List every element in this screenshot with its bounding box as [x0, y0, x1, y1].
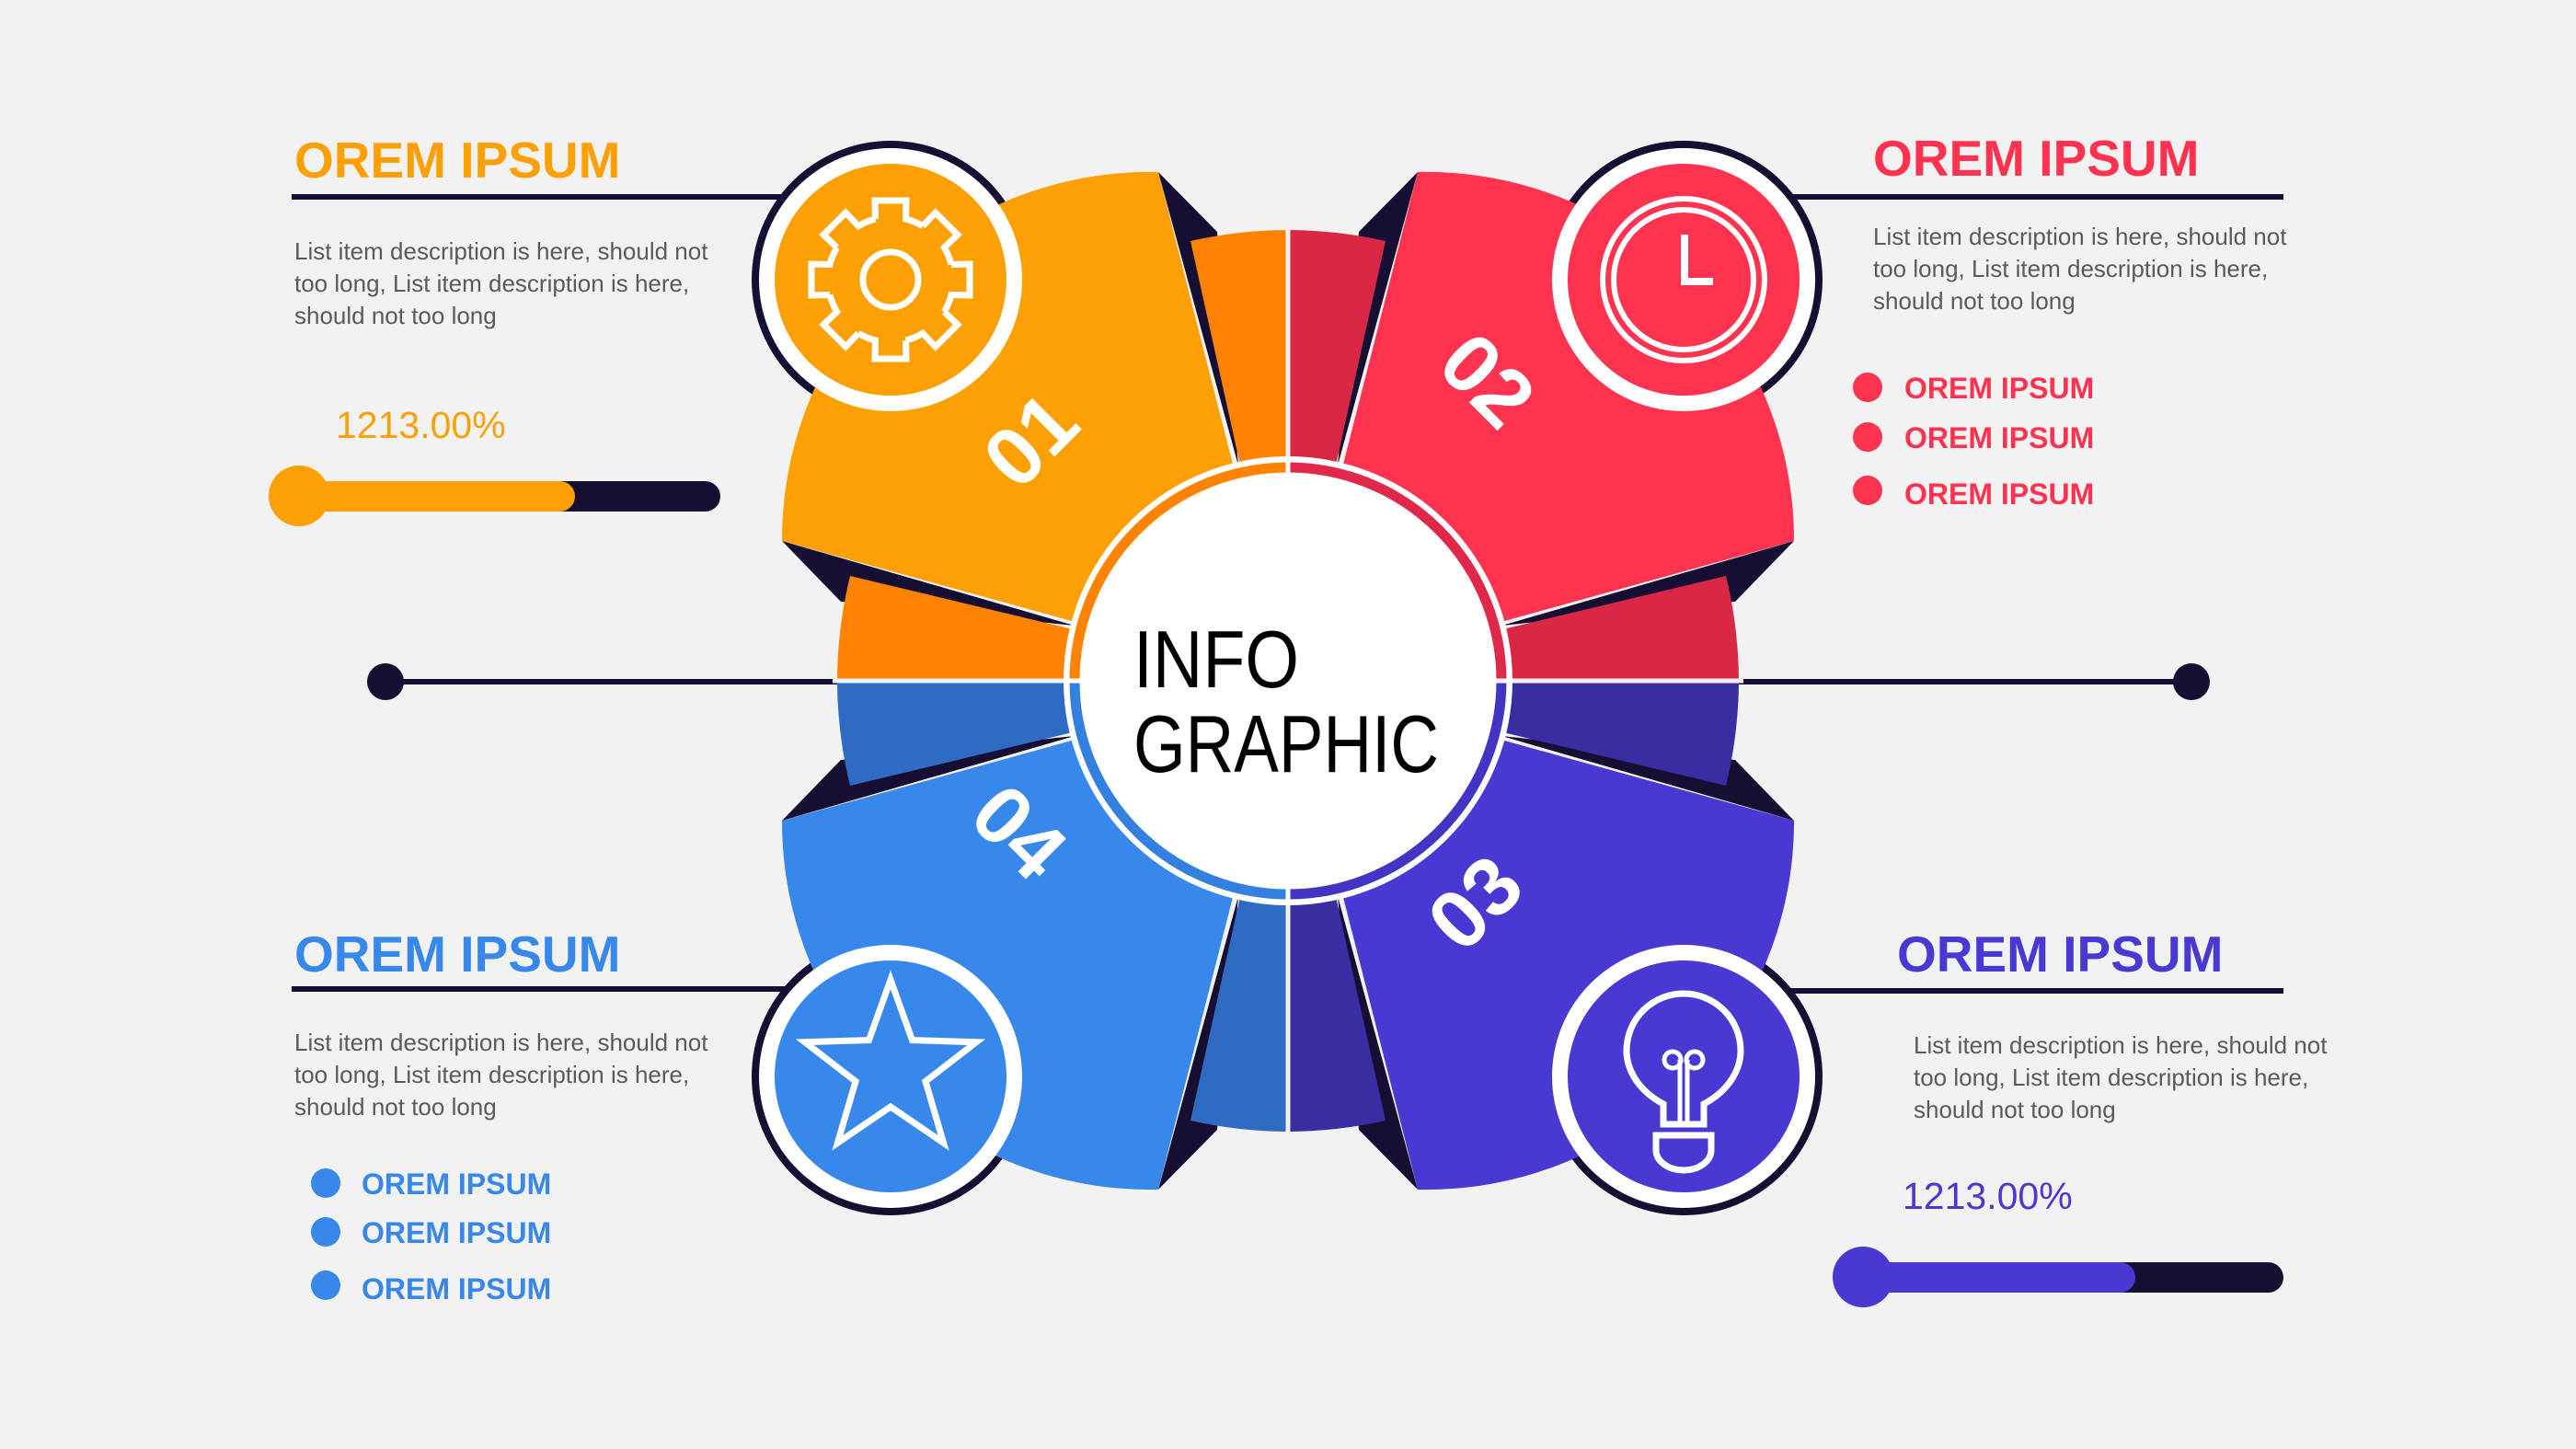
- icon: clock: [1552, 148, 1815, 411]
- panel: bottom-left: OREM IPSUM: [294, 926, 620, 983]
- center title: GRAPHIC: [1133, 698, 1439, 789]
- connector line right: [1720, 663, 2210, 700]
- segment numbers: [953, 316, 1552, 969]
- description bottom-right: [1914, 1031, 2328, 1123]
- segment 04 blue: [782, 681, 1288, 1190]
- description top-right: too long, List item description is here,: [1873, 255, 2268, 282]
- bullet list top-right: OREM IPSUM: [1904, 477, 2094, 511]
- segment numbers: 02: [1421, 316, 1552, 446]
- segment 02 red: [1288, 172, 1794, 681]
- title underlines: [292, 197, 2283, 991]
- panel: top-right: [1853, 130, 2287, 511]
- description top-left: List item description is here, should not: [294, 237, 708, 265]
- panel: top-left: [269, 132, 720, 526]
- segment 01 orange: [782, 172, 1288, 681]
- bullet list bottom-left: [311, 1167, 551, 1305]
- description top-left: should not too long: [294, 302, 497, 329]
- percentage bottom-right: 1213.00%: [1903, 1175, 2073, 1217]
- bullet list top-right: [1853, 372, 2094, 511]
- panel: bottom-right: [1833, 926, 2328, 1307]
- icon outer rings: [752, 141, 1823, 1215]
- description bottom-left: List item description is here, should not: [294, 1029, 708, 1056]
- segment numbers: 01: [966, 375, 1097, 506]
- bullet list bottom-left: OREM IPSUM: [362, 1272, 551, 1305]
- center circle: [1064, 456, 1512, 905]
- description top-right: List item description is here, should not: [1873, 223, 2287, 250]
- description top-left: too long, List item description is here,: [294, 270, 689, 297]
- percentage top-left: 1213.00%: [336, 404, 506, 446]
- description bottom-right: should not too long: [1914, 1096, 2116, 1123]
- description top-right: should not too long: [1873, 287, 2076, 315]
- icon: gear: [759, 148, 1022, 411]
- axis dividers: [833, 225, 1743, 1136]
- shadows: [782, 172, 1794, 1190]
- panel: top-left: OREM IPSUM: [294, 132, 620, 189]
- segment numbers: 04: [953, 767, 1084, 898]
- panel: bottom-right: OREM IPSUM: [1897, 926, 2223, 983]
- panel: top-right: OREM IPSUM: [1873, 130, 2199, 187]
- center title: INFO: [1133, 614, 1299, 705]
- progress bar top-left: [269, 466, 720, 526]
- description bottom-right: too long, List item description is here,: [1914, 1064, 2308, 1091]
- bullet list top-right: OREM IPSUM: [1904, 421, 2094, 454]
- description top-left: [294, 237, 708, 329]
- description bottom-left: too long, List item description is here,: [294, 1061, 689, 1088]
- panel: bottom-left: [294, 926, 708, 1305]
- bullet list bottom-left: OREM IPSUM: [362, 1167, 551, 1201]
- description top-right: [1873, 223, 2287, 315]
- icon: star: [759, 945, 1022, 1208]
- segment numbers: 03: [1410, 838, 1541, 969]
- bullet list top-right: OREM IPSUM: [1904, 372, 2094, 405]
- progress bar bottom-right: [1833, 1247, 2283, 1307]
- description bottom-left: [294, 1029, 708, 1121]
- bullet list bottom-left: OREM IPSUM: [362, 1216, 551, 1249]
- description bottom-left: should not too long: [294, 1093, 497, 1121]
- segment 03 purple: [1288, 681, 1794, 1190]
- description bottom-right: List item description is here, should not: [1914, 1031, 2328, 1059]
- icon: light bulb: [1552, 945, 1815, 1208]
- connector line left: [367, 663, 856, 700]
- center title: [1133, 614, 1439, 789]
